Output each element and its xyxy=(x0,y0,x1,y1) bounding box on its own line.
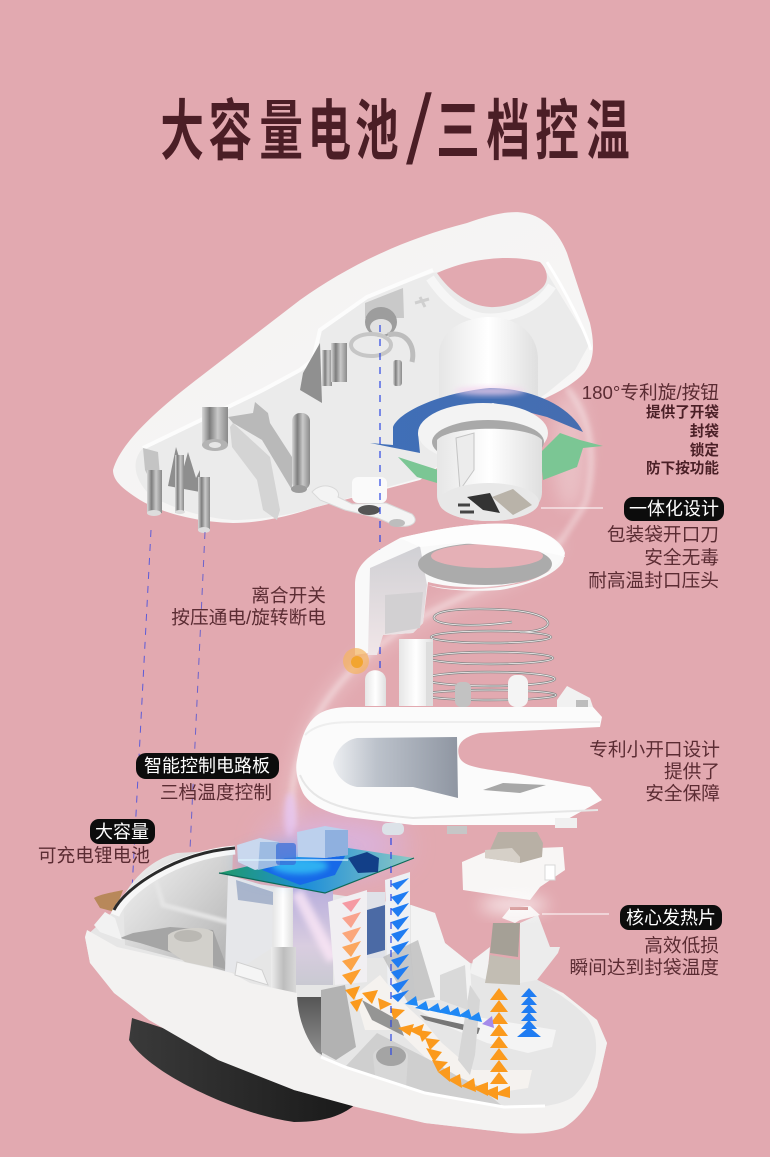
U-shaped base xyxy=(296,707,602,835)
top shell housing xyxy=(113,212,593,533)
rear right wall xyxy=(411,905,472,1000)
connector blocks xyxy=(237,838,280,870)
dashed lower guide xyxy=(390,838,392,1060)
pink arrow strip xyxy=(328,890,367,985)
label: heating element: 高效低损 xyxy=(644,935,719,956)
orange strip xyxy=(355,975,532,1093)
right wall gray xyxy=(458,985,480,1075)
callout line xyxy=(542,913,609,915)
heater glow xyxy=(480,897,548,913)
label: heating element: 瞬间达到封袋温度 xyxy=(570,957,719,978)
spring xyxy=(424,609,556,700)
battery cylinder xyxy=(123,850,233,972)
glow swirl xyxy=(265,388,591,873)
orange heat arrows: left column xyxy=(342,898,361,985)
circuit board xyxy=(219,826,414,893)
label: integrated design: 包装袋开口刀 xyxy=(607,524,719,545)
label: rotary knob: 180°专利旋/按钮 xyxy=(582,382,719,403)
clasp xyxy=(235,962,268,985)
left column xyxy=(225,875,273,972)
label: clutch switch: 离合开关 xyxy=(251,585,326,606)
label: integrated design: 一体化设计 xyxy=(629,499,719,519)
tray silhouette xyxy=(85,880,607,1133)
label: small opening design xyxy=(589,739,720,804)
floor xyxy=(345,1033,505,1108)
gray bosses xyxy=(143,288,413,533)
posts on base xyxy=(365,639,595,714)
label: clutch switch: 按压通电/旋转断电 xyxy=(171,607,326,628)
square opening xyxy=(483,783,546,793)
dashed guide lines xyxy=(132,325,380,890)
black base xyxy=(129,1018,356,1122)
clip at left xyxy=(94,912,122,940)
label: rotary knob: 防下按功能 xyxy=(646,459,719,477)
heating block xyxy=(462,832,565,900)
blue panel xyxy=(367,892,385,958)
post xyxy=(273,888,293,948)
bracket with ring xyxy=(355,524,565,655)
brown cloth xyxy=(94,890,123,912)
orange heat arrows: right column xyxy=(490,988,508,1084)
callout line xyxy=(541,507,603,509)
board glow xyxy=(237,844,353,880)
blue heat arrows: horizontal path xyxy=(405,996,494,1028)
label: heating element xyxy=(570,905,722,978)
label: heating element: 核心发热片 xyxy=(626,908,716,928)
label: control board: 智能控制电路板 xyxy=(144,756,270,776)
cylinder well xyxy=(373,1047,408,1088)
knob metal tab xyxy=(467,493,500,513)
switch knob dot xyxy=(343,648,369,674)
translucent wall xyxy=(383,940,435,1003)
blue heat arrows: right column xyxy=(517,988,541,1037)
label: integrated design: 耐高温封口压头 xyxy=(588,570,719,591)
blue heat arrows: left column xyxy=(391,878,409,1002)
label: battery xyxy=(38,819,155,866)
label: clutch switch xyxy=(171,585,326,628)
label: rotary knob xyxy=(582,382,719,477)
label: rotary knob: 提供了开袋 xyxy=(646,403,719,421)
knob dome xyxy=(439,317,538,410)
blue arrow strip xyxy=(385,872,416,1003)
blue strip xyxy=(408,1003,556,1053)
clutch switch plate xyxy=(312,477,415,527)
label: integrated design: 安全无毒 xyxy=(644,547,719,568)
center gray walls xyxy=(296,997,322,1055)
lower box and capacitor xyxy=(120,927,228,970)
title: 大容量电池三档控温 xyxy=(160,94,630,168)
label: integrated design xyxy=(588,497,724,591)
orange heat arrows: diagonal path xyxy=(345,986,510,1100)
hole xyxy=(437,258,547,307)
knob collar xyxy=(418,403,548,463)
label: control board xyxy=(136,753,279,803)
label: small opening design: 安全保障 xyxy=(645,783,720,804)
center column xyxy=(293,888,333,985)
label: battery: 大容量 xyxy=(95,822,149,842)
green arrow xyxy=(398,457,438,483)
plus mark xyxy=(415,297,429,307)
label: rotary knob: 锁定 xyxy=(690,441,719,459)
blue arrow xyxy=(370,388,583,453)
shell interior xyxy=(136,262,590,520)
lower device body xyxy=(85,848,607,1133)
label: small opening design: 专利小开口设计 xyxy=(589,739,720,760)
label: rotary knob: 封袋 xyxy=(690,422,719,440)
title xyxy=(160,74,630,186)
label: small opening design: 提供了 xyxy=(664,761,720,782)
label: control board: 三档温度控制 xyxy=(160,782,272,803)
heating clip xyxy=(470,906,560,985)
front shell xyxy=(85,930,607,1133)
wire xyxy=(115,850,235,915)
label: battery: 可充电锂电池 xyxy=(38,845,150,866)
rim highlight xyxy=(143,270,433,448)
rotary knob with rotation arrows xyxy=(370,317,603,521)
title: / xyxy=(405,74,433,186)
